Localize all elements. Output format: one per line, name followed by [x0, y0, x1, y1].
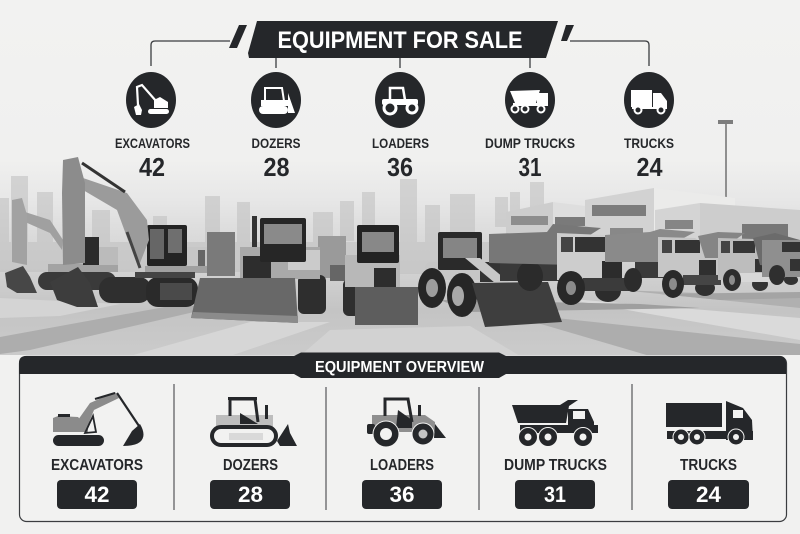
card: excavators: [51, 392, 144, 509]
item: excavators summary: EXCAVATORS: [115, 135, 190, 151]
machine: large excavator: [50, 157, 209, 307]
machine: dump truck four: [753, 233, 800, 285]
machine: wheel loader: [418, 232, 562, 327]
item: dozers summary: DOZERS: [252, 135, 300, 151]
strip below the yard: [0, 355, 800, 534]
icon: truck badge: [624, 72, 674, 128]
item: dozers summary: [251, 72, 301, 182]
value pill: 28: [238, 482, 263, 507]
icon: dozer badge: [251, 72, 301, 128]
card: dump trucks: [504, 400, 607, 509]
card: trucks: [666, 401, 753, 509]
value pill: 36: [390, 482, 414, 507]
icon: truck: [666, 401, 753, 445]
machine: small excavator: [5, 198, 118, 293]
icon: loader badge: [375, 72, 425, 128]
title banner: EQUIPMENT FOR SALE: [278, 27, 522, 54]
icon: loader: [367, 399, 446, 447]
card: dozers: DOZERS: [223, 457, 278, 474]
item: loaders summary: [372, 72, 429, 182]
machine: bulldozer one: [191, 216, 326, 323]
item: loaders summary: 36: [387, 152, 413, 182]
connector lines: [151, 41, 649, 68]
item: dump trucks summary: DUMP TRUCKS: [485, 135, 575, 151]
icon: dump truck: [512, 400, 598, 446]
hero scene: equipment yard: [0, 0, 800, 356]
icon: dump truck badge: [505, 72, 555, 128]
machine: dump truck one: [489, 224, 629, 305]
warehouses: [506, 188, 800, 250]
card: trucks: TRUCKS: [680, 457, 737, 474]
item: dump trucks summary: 31: [518, 152, 542, 182]
city skyline: [0, 176, 544, 278]
card: dump trucks: DUMP TRUCKS: [504, 457, 607, 474]
icon: excavator badge: [126, 72, 176, 128]
value pill: 31: [544, 482, 566, 507]
heading tab: [294, 352, 506, 378]
icon: excavator: [53, 392, 144, 446]
light pole: [718, 120, 733, 206]
card: loaders: LOADERS: [370, 457, 434, 474]
item: loaders summary: LOADERS: [372, 135, 429, 151]
title banner: [229, 21, 574, 58]
item: dozers summary: 28: [264, 152, 290, 182]
card: dozers: [210, 397, 297, 509]
item: trucks summary: [624, 72, 674, 182]
value pill: 42: [84, 482, 110, 507]
machine: background dozers: [207, 232, 346, 281]
machine: dump truck three: [698, 232, 774, 291]
value pill: 24: [696, 482, 722, 507]
card: loaders: [362, 399, 446, 509]
item: trucks summary: 24: [636, 152, 663, 182]
heading tab: EQUIPMENT OVERVIEW: [315, 359, 485, 376]
icon: dozer: [212, 397, 297, 446]
item: dump trucks summary: [485, 72, 575, 182]
ground: [0, 272, 800, 356]
item: trucks summary: TRUCKS: [624, 135, 674, 151]
machine: dump truck two: [605, 229, 721, 298]
item: excavators summary: [115, 72, 190, 182]
card: excavators: EXCAVATORS: [51, 457, 143, 474]
panel: equipment overview: [19, 352, 786, 522]
machine: bulldozer two: [343, 225, 418, 325]
item: excavators summary: 42: [139, 152, 165, 182]
